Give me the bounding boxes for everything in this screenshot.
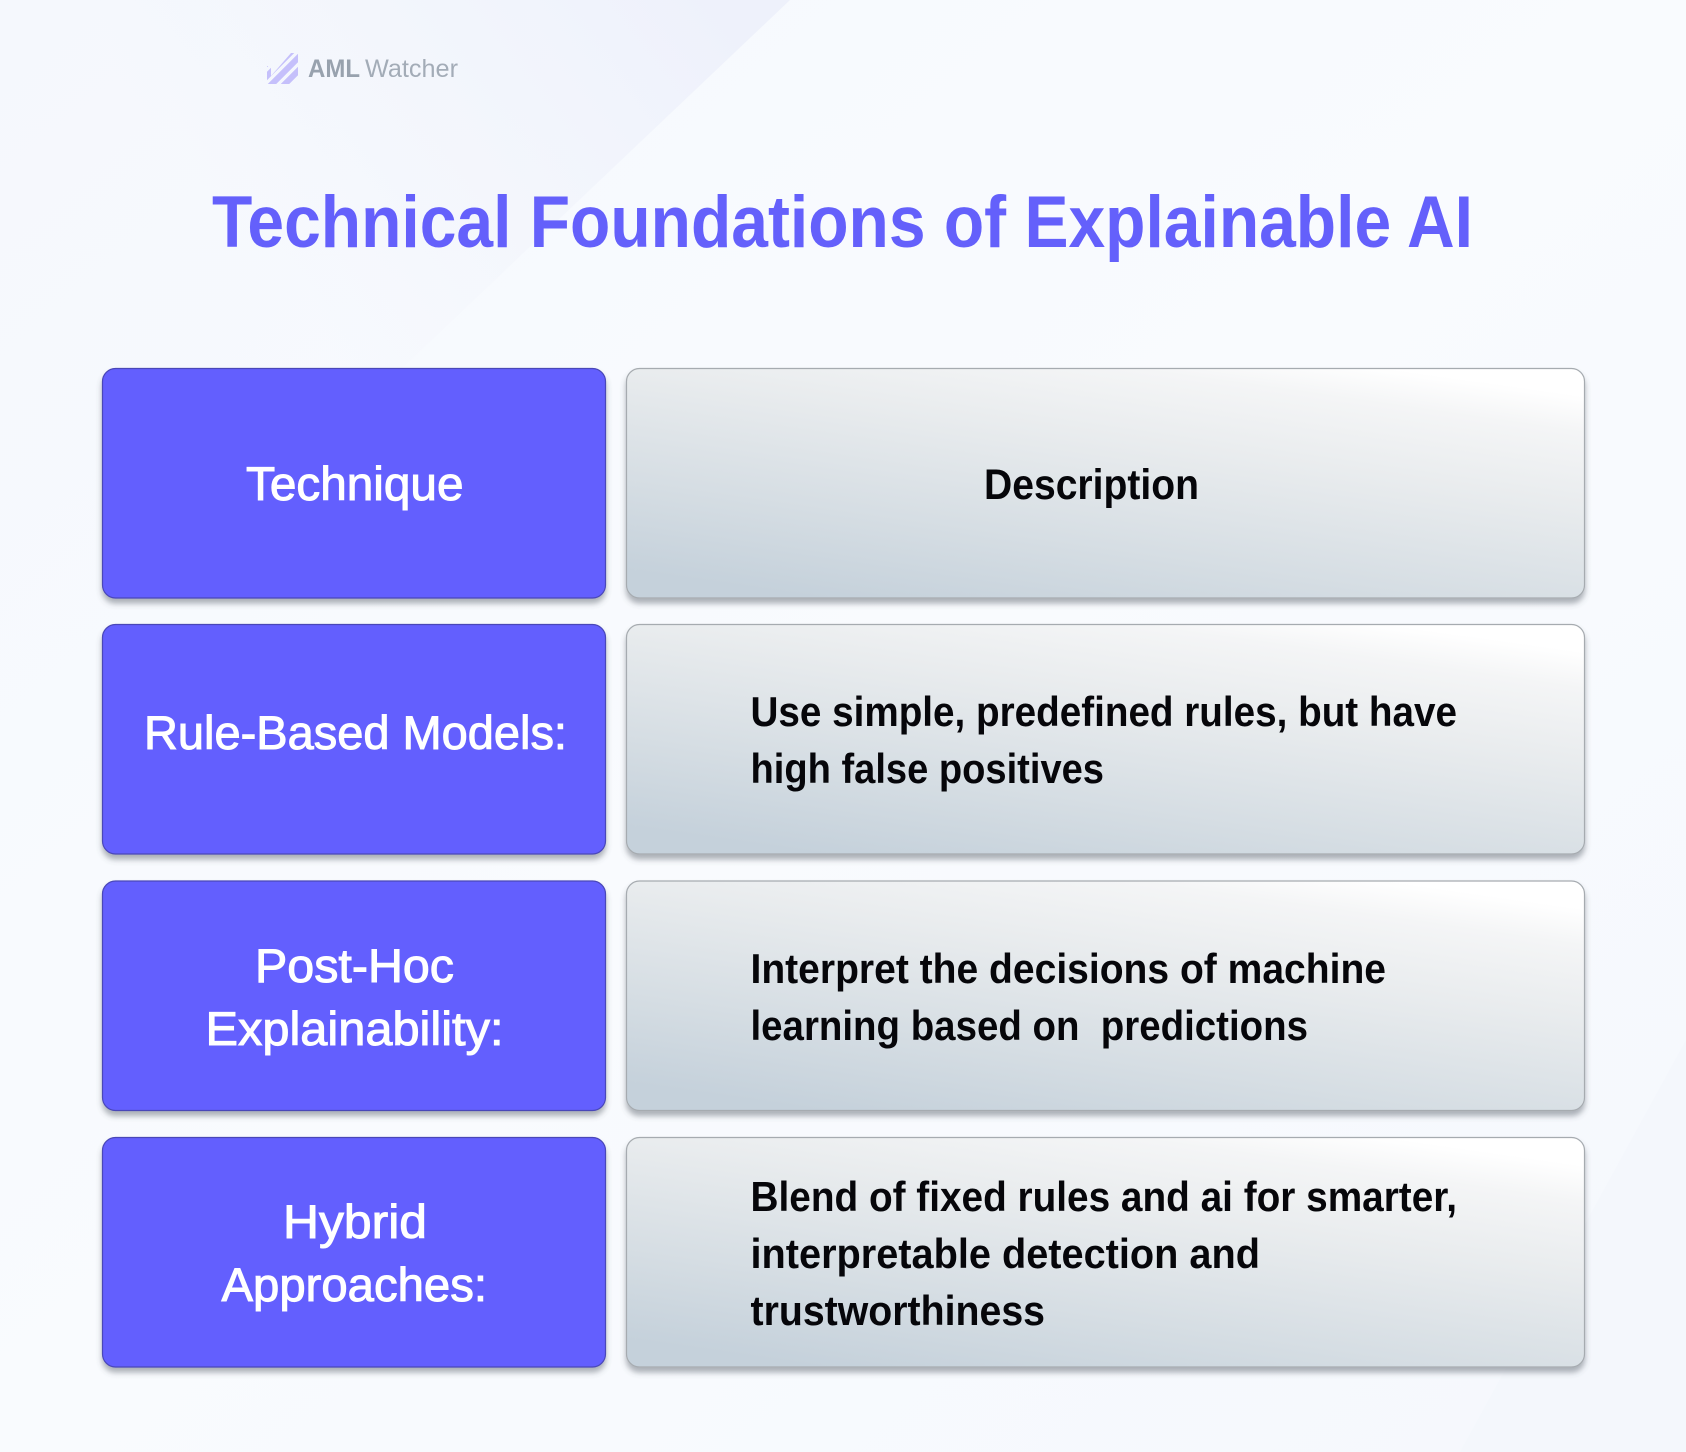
- panel: header technique: [102, 368, 606, 598]
- panel: post-hoc explainability label: Post-Hoc: [255, 939, 454, 992]
- panel: hybrid approaches description: interpretable detection and: [750, 1230, 1260, 1277]
- logo: AML Watcher: [267, 53, 458, 84]
- panel: rule-based models description: high false positives: [750, 745, 1104, 792]
- panel: hybrid approaches label: Hybrid: [283, 1195, 427, 1248]
- panel: hybrid approaches description: Blend of fixed rules and ai for smarter,: [750, 1173, 1457, 1220]
- panel: post-hoc explainability description: learning based on predictions: [750, 1002, 1308, 1049]
- title: Technical Foundations of Explainable AI: [212, 182, 1473, 263]
- logo wordmark: AML: [308, 55, 360, 83]
- panel: hybrid approaches description: trustworthiness: [750, 1287, 1045, 1334]
- panel: rule-based models label: Rule-Based Models:: [144, 706, 567, 759]
- panel: header description: Description: [984, 461, 1199, 509]
- panel: header description: [626, 368, 1584, 598]
- panel: hybrid approaches label: [102, 1138, 606, 1367]
- panel: post-hoc explainability label: Explainability:: [206, 1002, 504, 1055]
- panel: header technique: Technique: [246, 457, 464, 510]
- panel: rule-based models label: [102, 624, 606, 854]
- icon: striped logo mark: [267, 53, 298, 84]
- panel: post-hoc explainability description: Interpret the decisions of machine: [750, 945, 1386, 992]
- panel: hybrid approaches description: [626, 1138, 1584, 1367]
- panel: rule-based models description: Use simple, predefined rules, but have: [750, 688, 1457, 735]
- panel: post-hoc explainability description: [626, 881, 1584, 1110]
- panel: hybrid approaches label: Approaches:: [222, 1258, 487, 1311]
- panel: post-hoc explainability label: [102, 881, 606, 1110]
- panel: rule-based models description: [626, 624, 1584, 854]
- logo wordmark: Watcher: [365, 55, 458, 83]
